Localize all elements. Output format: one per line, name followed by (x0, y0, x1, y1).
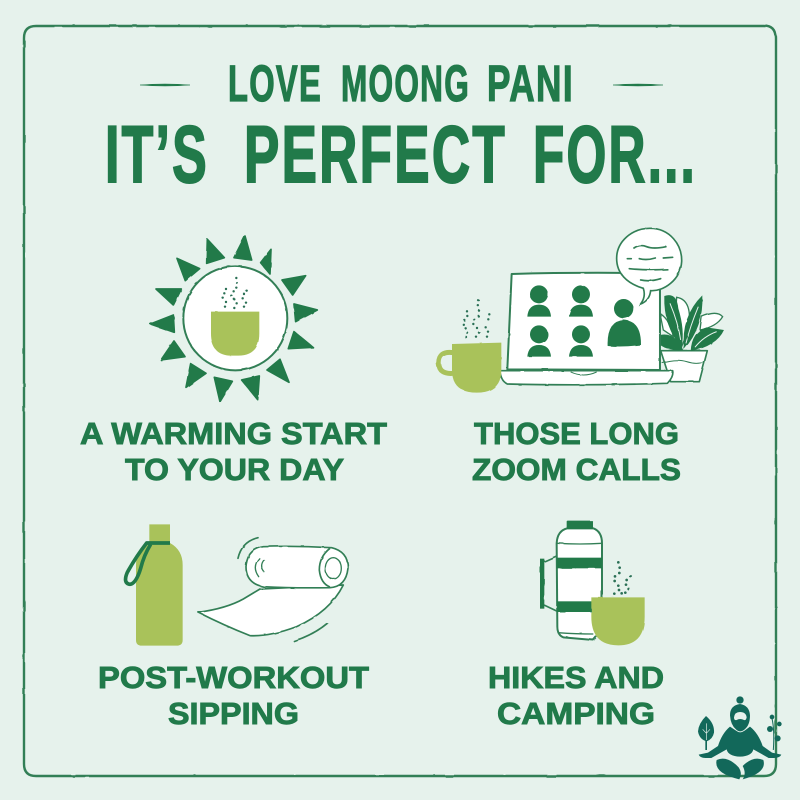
laptop base (500, 371, 673, 385)
eyebrow heading: MOONG (341, 55, 470, 112)
label: zoom calls: ZOOM CALLS (472, 452, 681, 487)
icon: thermos and cup (540, 521, 645, 645)
label: post-workout: SIPPING (168, 696, 299, 731)
eyebrow heading (140, 55, 663, 112)
label: warming start: A WARMING START (80, 416, 387, 451)
logo: meditating figure (698, 696, 782, 779)
label: post-workout: POST-WORKOUT (98, 660, 369, 695)
label: zoom calls: THOSE LONG (474, 416, 679, 451)
icon: yoga mat (198, 538, 348, 641)
label: hikes and camping (488, 660, 664, 731)
main heading: IT’S (105, 110, 209, 200)
label: hikes and camping: HIKES AND (488, 660, 664, 695)
icon: laptop video call with mug and plant (439, 228, 724, 393)
main heading: PERFECT (244, 110, 507, 200)
eyebrow heading: PANI (487, 55, 574, 112)
icon: water bottle (126, 524, 183, 646)
plant pot (661, 351, 707, 382)
main heading: FOR... (533, 110, 697, 200)
label: hikes and camping: CAMPING (497, 696, 655, 731)
video participants (527, 285, 641, 357)
laptop screen (507, 273, 660, 370)
label: post-workout (98, 660, 369, 731)
label: warming start: TO YOUR DAY (125, 452, 344, 487)
eyebrow heading: LOVE (228, 55, 322, 112)
speech bubble (617, 228, 682, 304)
plant leaves (660, 295, 724, 351)
label: warming start (80, 416, 387, 487)
label: zoom calls (472, 416, 681, 487)
main heading (105, 110, 697, 200)
mug (439, 299, 501, 393)
icon: sun with cup (150, 236, 317, 402)
